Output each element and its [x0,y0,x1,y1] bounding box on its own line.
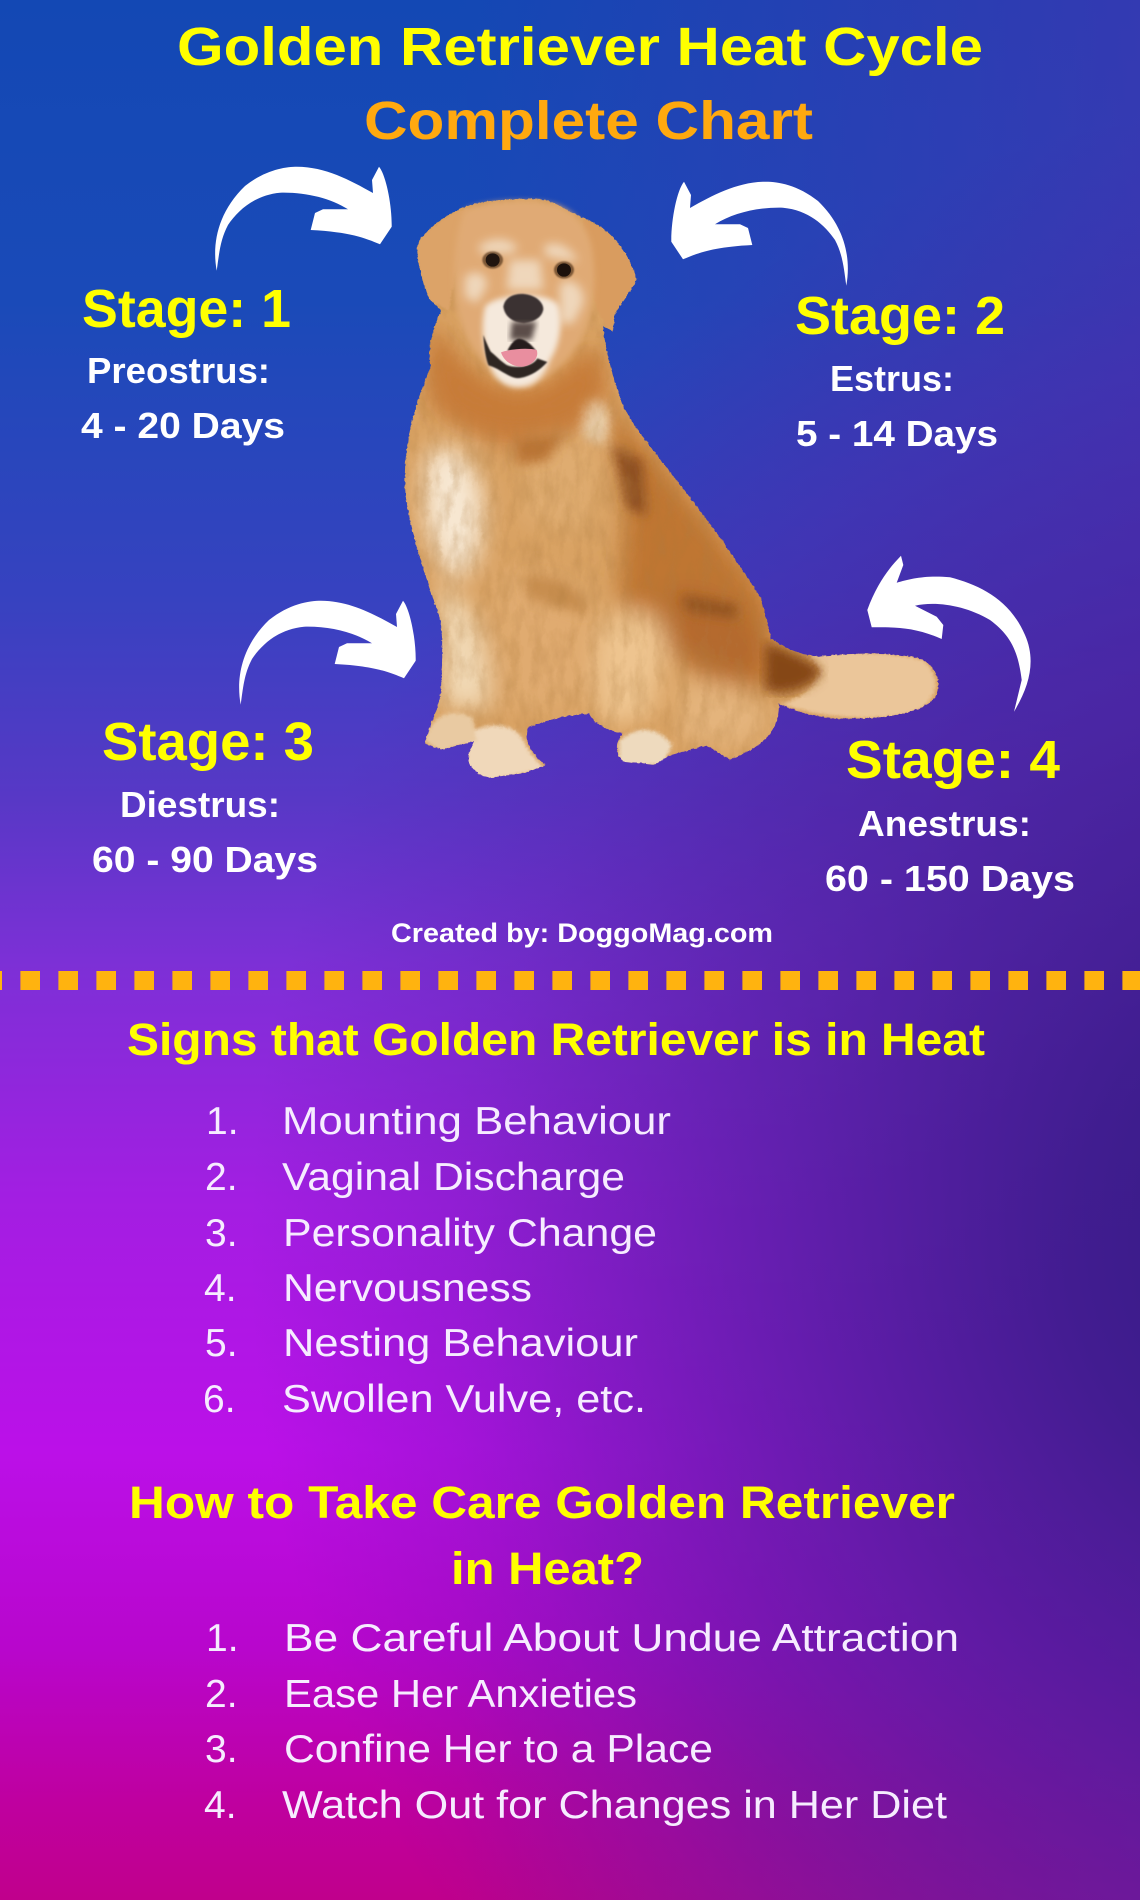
list: care: 1. [206,1617,239,1660]
list: signs: Vaginal Discharge [282,1156,625,1199]
stage 2 name: Estrus: [830,358,954,399]
stage 3 name: Diestrus: [120,784,280,825]
eyes [482,251,574,279]
heading: care: How to Take Care Golden Retriever [129,1477,955,1528]
dog paws [425,713,672,781]
stage 3 duration: 60 - 90 Days [92,839,318,880]
stage 4 [825,730,1075,899]
dog neck ruff and ears [430,318,600,431]
stage 1 duration: 4 - 20 Days [81,405,285,446]
heading: signs: Signs that Golden Retriever is in Heat [127,1014,985,1065]
muzzle [483,295,560,387]
list: care: 3. [205,1728,238,1771]
arrow: stage 1 [215,167,392,271]
stage 1: Stage: 1 [82,279,291,339]
dog face [454,201,594,387]
stage 4 duration: 60 - 150 Days [825,858,1075,899]
list: signs: Mounting Behaviour [282,1100,671,1143]
dog illustration [390,192,951,785]
list: signs: 3. [205,1212,238,1255]
list: care: Be Careful About Undue Attraction [284,1617,959,1660]
list: signs: 2. [205,1156,238,1199]
stage 3: Stage: 3 [102,712,314,772]
list: care: Confine Her to a Place [284,1728,713,1771]
arrow: stage 4 [867,556,1031,712]
stage 1 [81,279,291,446]
list: signs [203,1100,671,1421]
brow and cheek highlights [465,239,583,323]
stage 1 name: Preostrus: [87,350,270,391]
stage 4 name: Anestrus: [858,803,1031,844]
list: care: 4. [204,1784,237,1827]
heading: care: in Heat? [451,1543,644,1594]
list: care: Watch Out for Changes in Her Diet [282,1784,947,1827]
list: care [204,1617,959,1827]
stage 2 duration: 5 - 14 Days [796,413,998,454]
list: signs: 6. [203,1378,236,1421]
title: Golden Retriever Heat Cycle [177,17,983,77]
list: signs: Swollen Vulve, etc. [282,1378,646,1421]
stage 2: Stage: 2 [795,286,1005,346]
dog body and fur [390,192,951,785]
list: care: 2. [205,1673,238,1716]
heading: care [129,1477,955,1594]
list: signs: 4. [204,1267,237,1310]
stage 3 [92,712,318,880]
nose [503,294,543,323]
tongue [501,349,537,367]
list: signs: 5. [205,1322,238,1365]
lips [483,335,547,378]
dog tail [779,653,936,718]
list: signs: Nesting Behaviour [283,1322,638,1365]
subtitle: Complete Chart [364,91,813,151]
list: signs: Nervousness [283,1267,532,1310]
list: signs: 1. [206,1100,239,1143]
title [177,17,983,151]
arrow: stage 3 [239,601,416,705]
list: signs: Personality Change [283,1212,657,1255]
list: care: Ease Her Anxieties [284,1673,637,1716]
stage 2 [795,286,1005,454]
credit line: Created by: DoggoMag.com [391,918,773,948]
mouth interior [507,339,536,351]
stage 4: Stage: 4 [846,730,1060,790]
face base [454,201,594,387]
arrow: stage 2 [671,182,848,286]
